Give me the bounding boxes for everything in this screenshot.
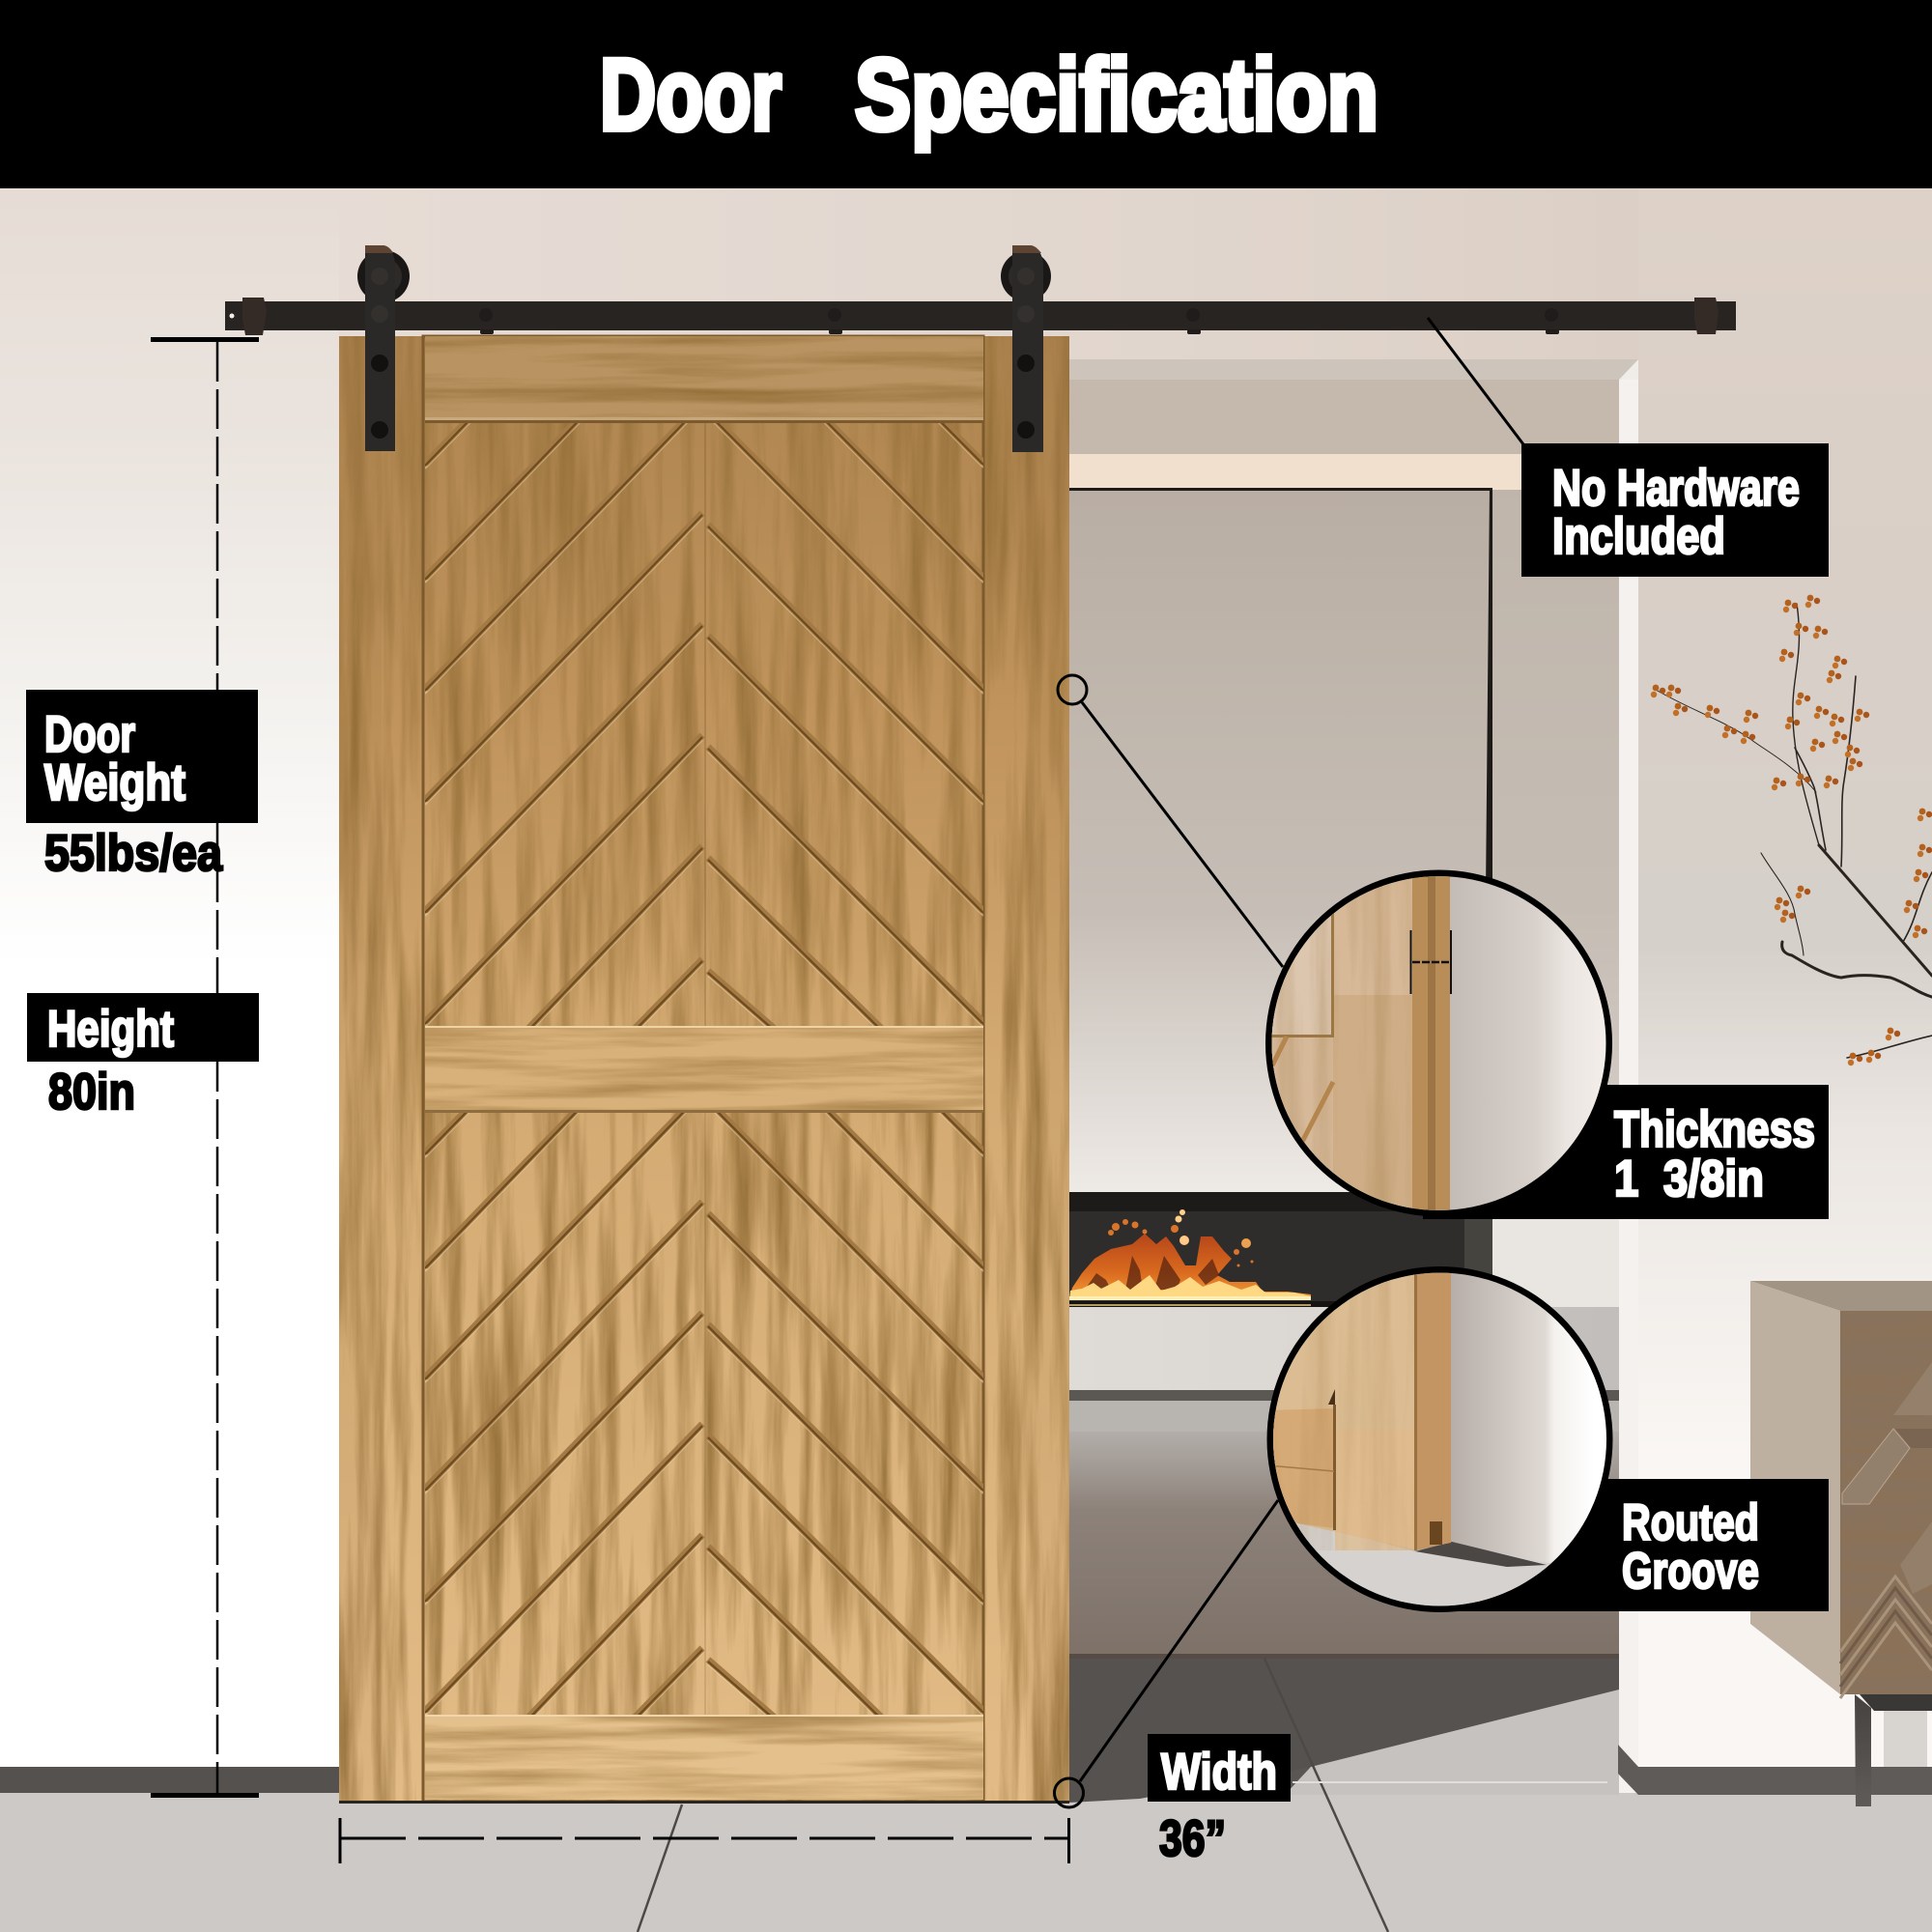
callout: width: Width (1161, 1744, 1277, 1801)
barn door (339, 180, 1069, 1804)
label: door weight: Door (44, 706, 135, 763)
room seen through the doorway (1069, 359, 1638, 1799)
label: height: 80in (48, 1064, 135, 1121)
flames (1069, 1209, 1311, 1300)
left hanger (357, 245, 410, 451)
stop blocks (242, 298, 267, 335)
callout: no hardware included: Included (1552, 508, 1725, 565)
floor and baseboards (0, 1659, 1932, 1932)
width dimension line (340, 1818, 1069, 1863)
callout: no hardware included: No Hardware (1552, 460, 1800, 517)
title: Specification (855, 39, 1378, 152)
label: door weight: 55lbs/ea (44, 825, 222, 882)
cabinet (1750, 1281, 1932, 1806)
callout: routed groove: Groove (1622, 1543, 1759, 1600)
fireplace (1069, 1192, 1619, 1311)
callout: thickness: Thickness (1614, 1101, 1815, 1158)
panels with chevron grooves (425, 180, 983, 1729)
branch with berries (1651, 595, 1932, 1065)
label: door weight (26, 690, 258, 882)
label: height: Height (47, 1001, 174, 1058)
height dimension line (151, 337, 259, 1798)
title bar (0, 0, 1932, 188)
track rail (225, 298, 1736, 335)
rail spacers (479, 308, 1559, 334)
label: height (27, 993, 259, 1121)
cabinet front chevron planks (1842, 1429, 1910, 1504)
magnifier: door edge thickness (1265, 869, 1613, 1217)
callout: width: 36” (1159, 1810, 1226, 1867)
right hanger (1001, 245, 1051, 452)
callout: routed groove: Routed (1622, 1494, 1759, 1551)
bottom rail (425, 1715, 983, 1800)
callout: routed groove (1265, 1265, 1829, 1623)
title (600, 39, 1378, 152)
callout: thickness: 1 3/8in (1614, 1151, 1764, 1208)
magnifier: routed groove (1265, 1265, 1618, 1623)
top rail (425, 336, 983, 423)
callout: width (1055, 1500, 1291, 1867)
title: Door (600, 39, 781, 152)
middle rail (425, 1026, 983, 1113)
label: door weight: Weight (44, 754, 185, 811)
callout: no hardware included (1428, 318, 1829, 577)
callout: thickness (1058, 675, 1829, 1219)
